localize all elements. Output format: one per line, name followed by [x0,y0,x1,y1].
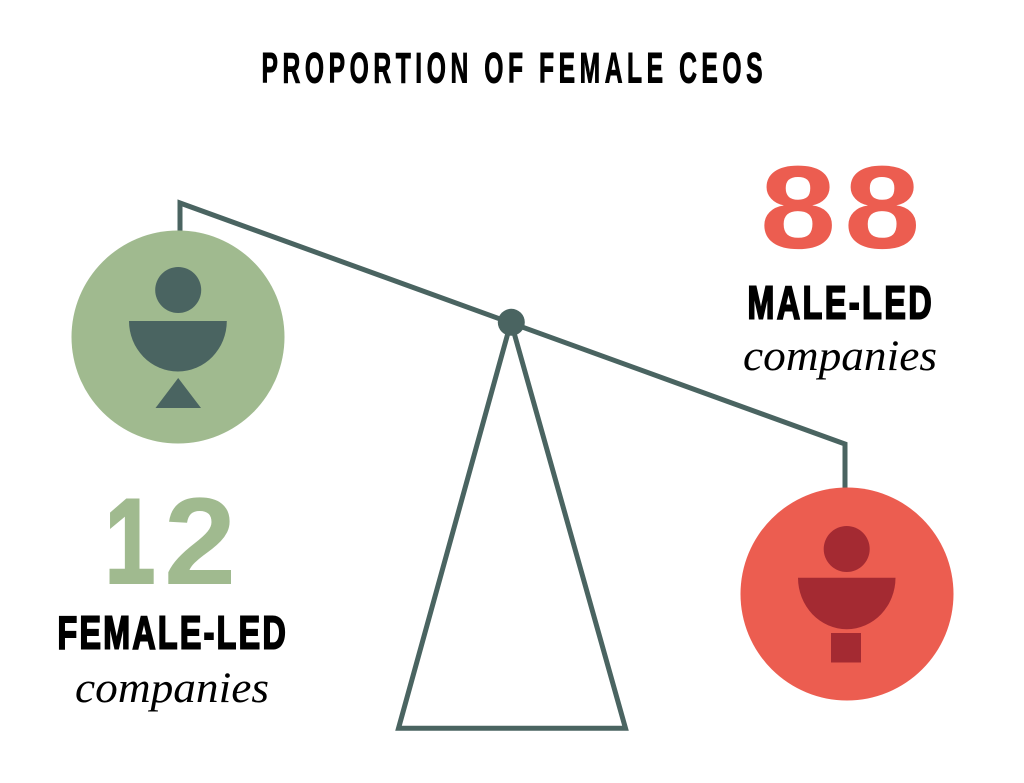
icon: female circle [72,230,284,444]
number: 12: 2 [164,472,236,610]
number: 12: 1 [105,475,155,609]
icon: male circle [740,488,954,700]
label: female-led: companies [75,665,269,712]
label: male-led: MALE-LED [748,278,932,329]
number: 12 [105,472,236,610]
scale: pivot [498,309,525,336]
label: female-led [58,608,286,712]
title: PROPORTION OF FEMALE CEOS [262,46,763,92]
label: male-led [743,278,937,380]
label: female-led: FEMALE-LED [58,608,286,659]
scale: beam [180,203,845,489]
label: male-led: companies [743,333,937,380]
scale: base triangle [398,322,626,728]
number: 88: 88 [760,142,920,274]
